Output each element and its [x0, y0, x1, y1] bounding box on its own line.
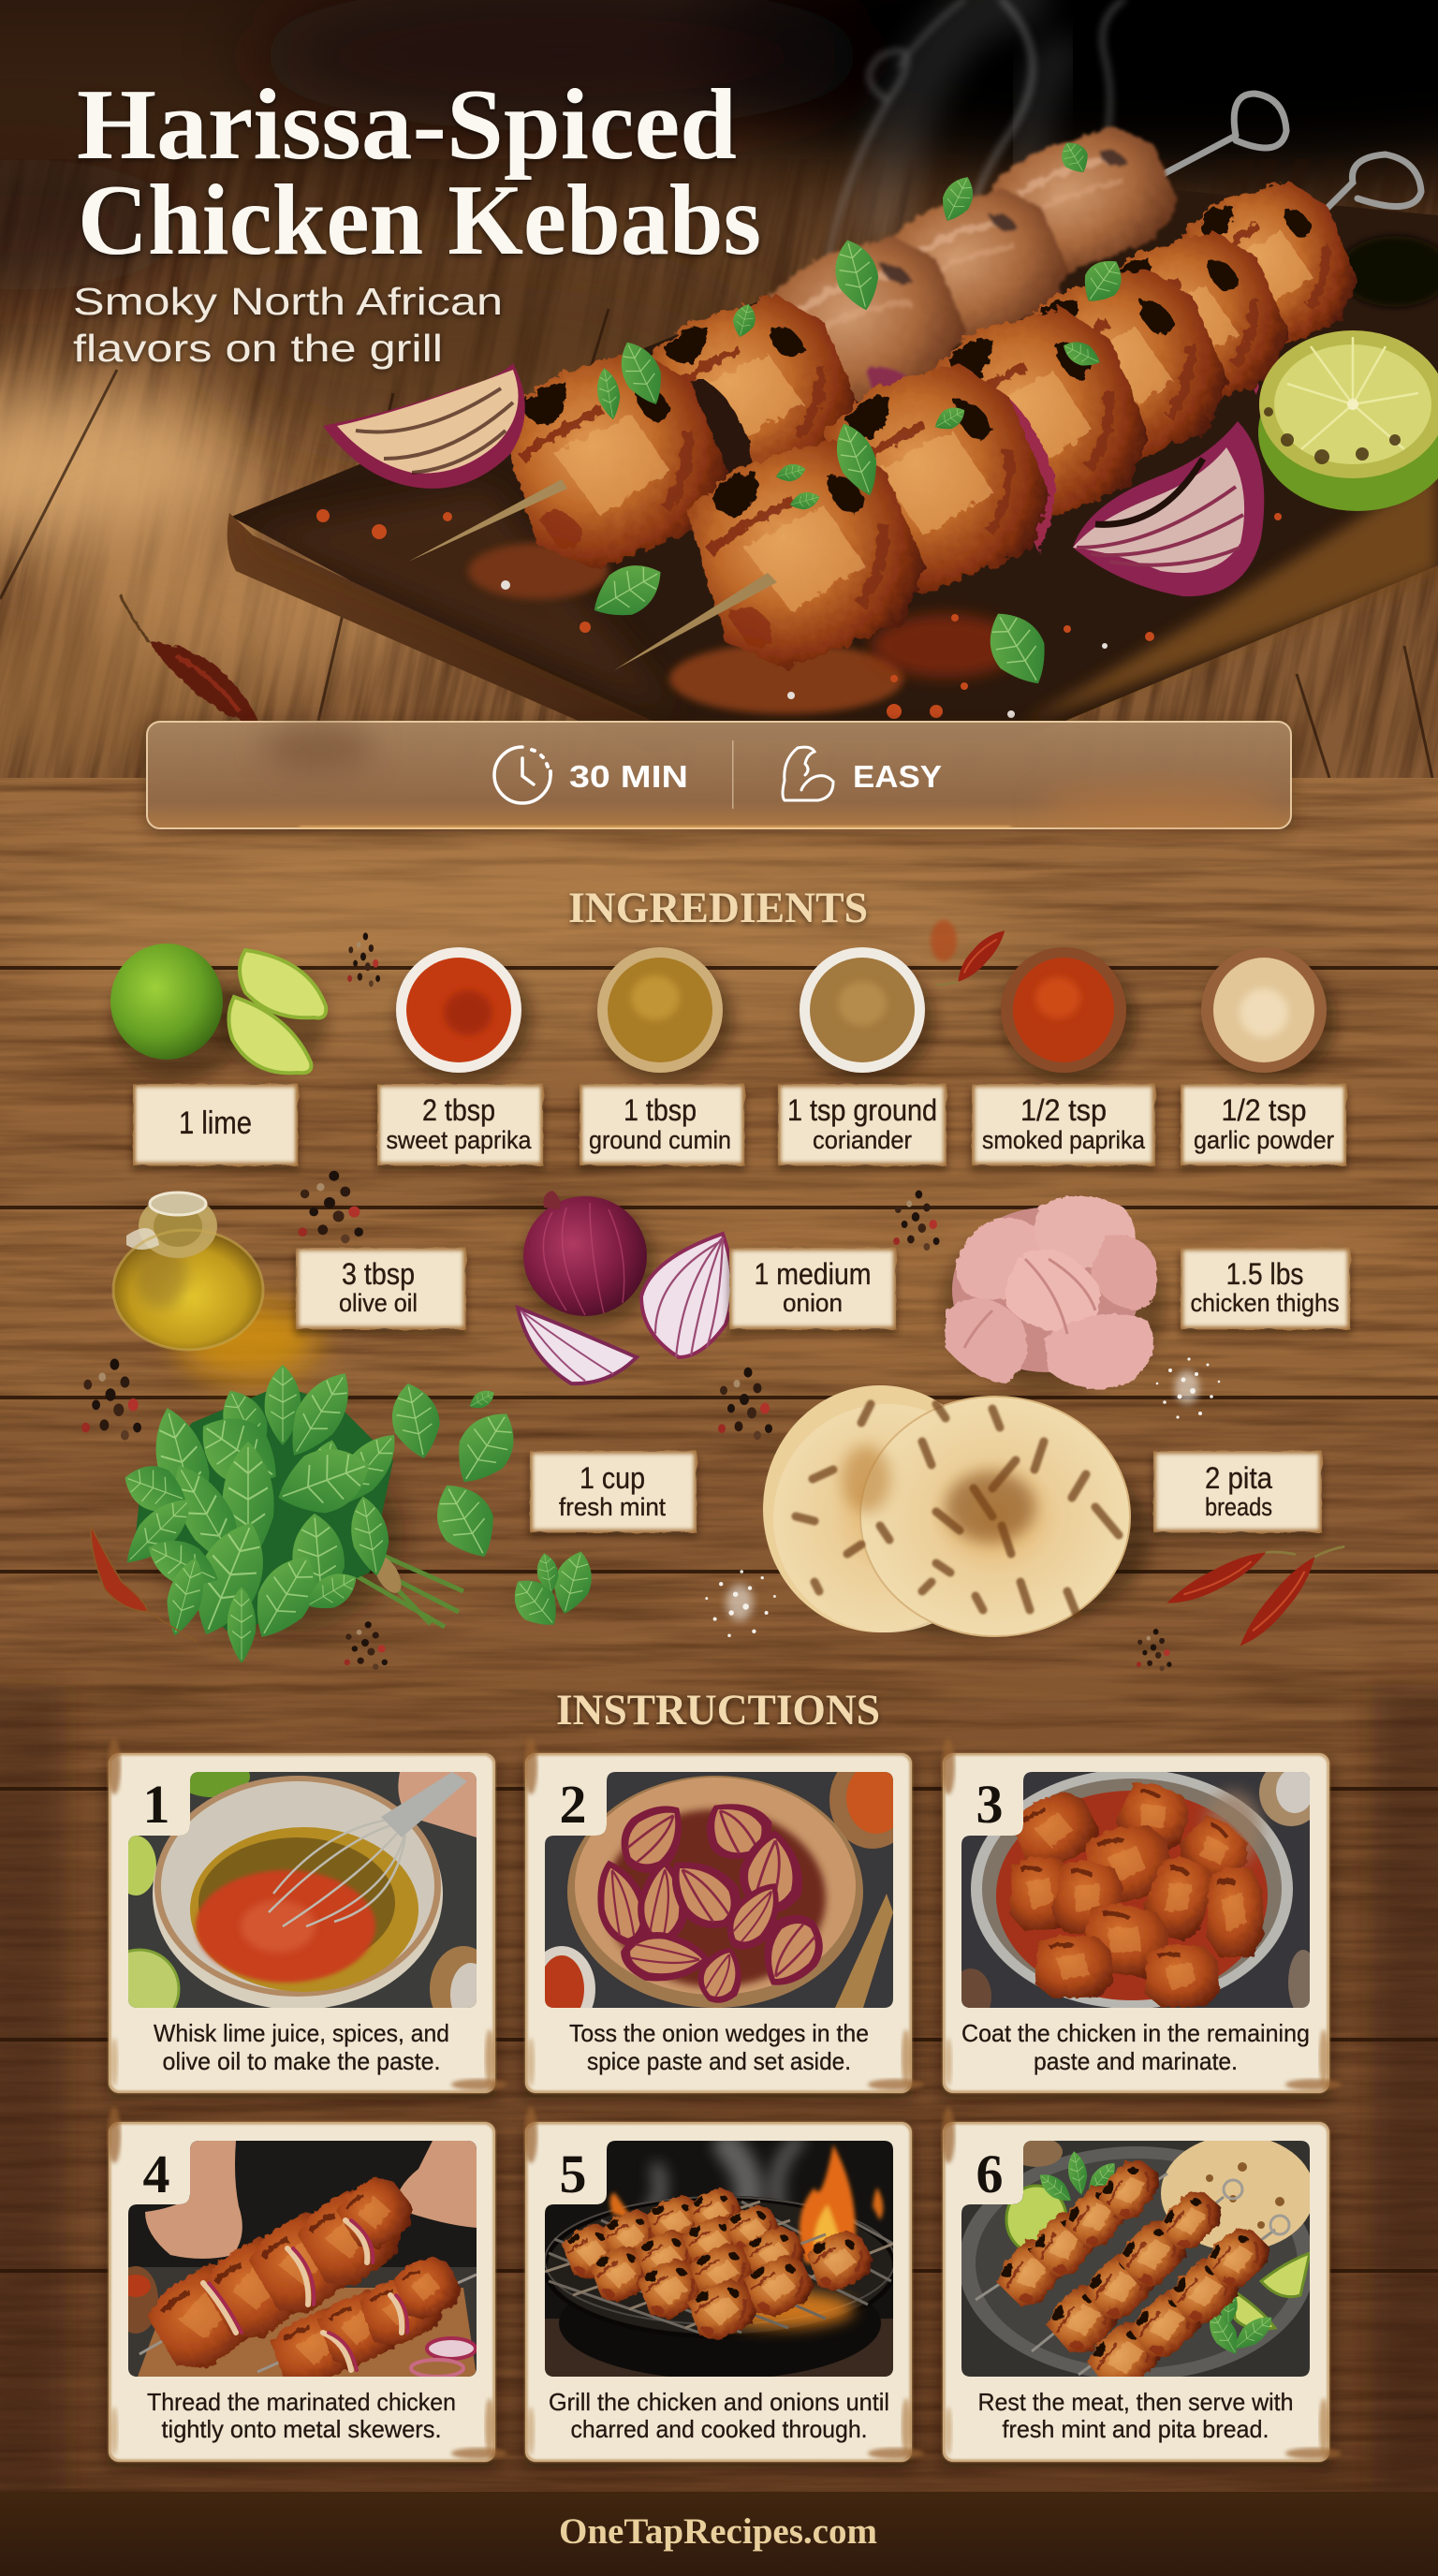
label: medium onion: 1 medium	[755, 1257, 871, 1291]
label: olive oil	[295, 1248, 467, 1335]
icon: peppercorns near chicken	[893, 1191, 940, 1251]
step text	[961, 2019, 1310, 2075]
footer band	[0, 2492, 1438, 2576]
label: sweet paprika	[376, 1084, 544, 1171]
icon: bowl ground coriander	[800, 947, 935, 1082]
step text: olive oil to make the paste.	[163, 2047, 440, 2075]
step text: Rest the meat, then serve with	[977, 2388, 1294, 2416]
title	[77, 69, 761, 276]
label: ground cumin: ground cumin	[589, 1126, 731, 1154]
label: pita breads: 2 pita	[1205, 1461, 1272, 1495]
label: olive oil: 3 tbsp	[342, 1257, 415, 1291]
footer text: OneTapRecipes.com	[559, 2511, 877, 2552]
step number: 6	[976, 2144, 1004, 2204]
icon: pita breads	[763, 1385, 1152, 1638]
step number: 3	[976, 1774, 1004, 1835]
step text: paste and marinate.	[1034, 2047, 1238, 2075]
title: Chicken Kebabs	[78, 165, 761, 276]
label: fresh mint: 1 cup	[580, 1461, 645, 1495]
label: medium onion: onion	[783, 1289, 843, 1317]
step number: 4	[142, 2144, 170, 2204]
step text: Grill the chicken and onions until	[549, 2388, 889, 2416]
panel: step 6	[941, 2107, 1342, 2468]
photo: whisking paste	[100, 1756, 497, 2032]
label: ground coriander: coriander	[813, 1126, 912, 1154]
label: sweet paprika: sweet paprika	[386, 1126, 532, 1154]
label: pita breads	[1152, 1451, 1323, 1538]
icon: clock	[494, 747, 550, 803]
garnish mint on kebabs	[594, 137, 1131, 513]
icon: bowl garlic powder	[1201, 947, 1337, 1082]
panel: step 3	[941, 1738, 1342, 2100]
icon: mint bunch	[114, 1362, 463, 1663]
photo: threading skewers	[113, 2141, 477, 2396]
label: smoked paprika: 1/2 tsp	[1020, 1093, 1107, 1127]
step text	[549, 2388, 889, 2443]
icon: peppercorns left	[81, 1359, 141, 1441]
subtitle: Smoky North African	[73, 280, 503, 323]
label: medium onion	[728, 1248, 897, 1335]
icon: limes	[110, 944, 328, 1080]
label: chicken thighs: 1.5 lbs	[1226, 1257, 1303, 1291]
panel: time and difficulty bar	[145, 722, 1292, 833]
icon: mint leaves on board	[582, 551, 1061, 696]
icon: grilled lime	[1258, 330, 1438, 511]
heading: instructions: INSTRUCTIONS	[556, 1686, 880, 1734]
label: ground cumin: 1 tbsp	[624, 1093, 697, 1127]
icon: grilled onion left	[323, 363, 525, 489]
icon: chili peppers	[91, 1526, 1344, 1662]
icon: raw chicken thighs	[941, 1196, 1166, 1392]
step text	[569, 2019, 869, 2075]
subtitle: flavors on the grill	[73, 327, 443, 370]
label: smoked paprika: smoked paprika	[982, 1126, 1146, 1154]
panel: hero	[0, 0, 1438, 786]
panel: step 5	[523, 2107, 924, 2468]
icon: peppercorns near oil	[298, 1171, 363, 1243]
panel: wood table background	[0, 778, 1438, 2500]
icon: bowl ground cumin	[597, 947, 733, 1082]
photo: served kebabs	[959, 2135, 1314, 2401]
step text	[977, 2388, 1294, 2443]
label: smoked paprika	[971, 1084, 1156, 1171]
cutting board	[227, 178, 1438, 754]
title: Harissa-Spiced	[77, 69, 737, 181]
dark back area	[693, 0, 1438, 178]
icon: peppercorns center	[718, 1368, 772, 1440]
label: fresh mint	[529, 1451, 697, 1538]
panel: step 1	[100, 1738, 507, 2100]
label: chicken thighs: chicken thighs	[1191, 1289, 1339, 1317]
step text	[147, 2388, 456, 2443]
icon: salt pile lower	[705, 1570, 776, 1637]
label: fresh mint: fresh mint	[559, 1493, 666, 1521]
subtitle	[73, 280, 503, 370]
photo: marinating chicken	[950, 1759, 1323, 2025]
label: easy: EASY	[853, 759, 942, 794]
photo: tossing onions	[528, 1751, 916, 2032]
icon: salt pile upper	[1156, 1357, 1220, 1419]
panel: step 4	[107, 2107, 507, 2468]
photo: grilling	[545, 2141, 895, 2379]
icon: bowl sweet paprika	[396, 947, 532, 1082]
step text: fresh mint and pita bread.	[1002, 2415, 1269, 2443]
label: ground coriander	[777, 1084, 947, 1171]
label: garlic powder	[1180, 1084, 1347, 1171]
label: olive oil: olive oil	[339, 1289, 418, 1317]
label: garlic powder: 1/2 tsp	[1221, 1093, 1307, 1127]
back skewer tip	[408, 479, 567, 562]
panel: step 2	[523, 1738, 924, 2100]
label: 30 min: 30 MIN	[569, 759, 688, 794]
icon: flexed arm	[783, 747, 833, 800]
icon: skewer rings	[1163, 90, 1425, 211]
label: sweet paprika: 2 tbsp	[422, 1093, 495, 1127]
label: 1 lime	[132, 1084, 299, 1171]
icon: dried chili	[96, 595, 280, 733]
back skewer	[767, 124, 1179, 402]
label: ground coriander: 1 tsp ground	[787, 1093, 937, 1127]
step text: Thread the marinated chicken	[147, 2388, 456, 2416]
step text: charred and cooked through.	[571, 2415, 867, 2443]
label: pita breads: breads	[1205, 1493, 1272, 1521]
step text	[154, 2019, 449, 2075]
icon: red onions	[518, 1191, 732, 1383]
icon: smoke	[823, 0, 1127, 256]
step text: spice paste and set aside.	[587, 2047, 851, 2075]
step text: tightly onto metal skewers.	[161, 2415, 442, 2443]
icon: scattered spice and chili	[347, 916, 1008, 1002]
front skewer	[670, 166, 1370, 686]
icon: bowl smoked paprika	[1001, 947, 1137, 1082]
icon: olive oil jar	[113, 1193, 318, 1380]
label: garlic powder: garlic powder	[1194, 1126, 1334, 1154]
step number: 2	[560, 1774, 586, 1835]
heading: ingredients: INGREDIENTS	[568, 884, 868, 932]
step text: Whisk lime juice, spices, and	[154, 2019, 449, 2047]
icon: loose mint leaves	[385, 1379, 598, 1637]
icon: peppercorns bottom	[345, 1621, 1172, 1671]
step number: 5	[560, 2144, 586, 2204]
step text: Toss the onion wedges in the	[569, 2019, 869, 2047]
step number: 1	[142, 1774, 170, 1835]
label: ground cumin	[579, 1084, 745, 1171]
middle chunks of back skewer	[484, 277, 872, 586]
label: chicken thighs	[1180, 1248, 1351, 1335]
step text: Coat the chicken in the remaining	[961, 2019, 1310, 2047]
label: 1 lime: 1 lime	[179, 1105, 252, 1141]
icon: grilled onion right	[1073, 421, 1264, 596]
